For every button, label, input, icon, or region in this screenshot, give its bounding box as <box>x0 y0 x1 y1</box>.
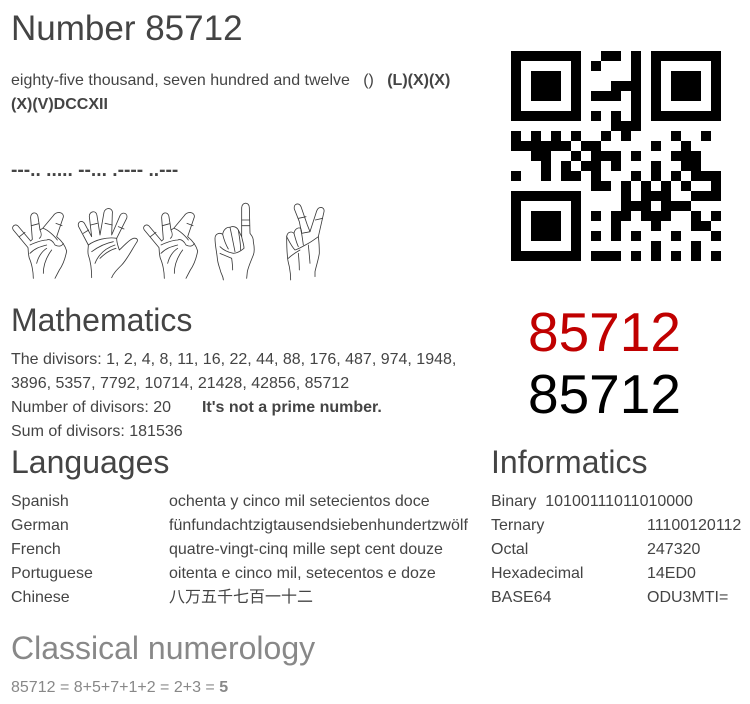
icon: hand 5 <box>78 209 137 278</box>
number name in words and roman numeral <box>11 72 450 113</box>
heading: classical numerology: Classical numerology <box>11 630 315 666</box>
icon: hand 1 <box>215 203 254 280</box>
black number: 85712 <box>528 363 681 425</box>
languages table: oitenta e cinco mil, setecentos e doze <box>169 565 436 582</box>
number name in words and roman numeral: (X)(V)DCCXII <box>11 96 108 113</box>
heading: informatics: Informatics <box>491 444 647 480</box>
icon: hand 7 <box>144 213 198 278</box>
icon: sign language hands <box>12 202 324 280</box>
icon: hand 2 <box>287 204 324 280</box>
informatics table: Hexadecimal <box>491 565 583 582</box>
languages table: German <box>11 517 69 534</box>
mathematics text block: The divisors: 1, 2, 4, 8, 11, 16, 22, 44, 88, 176, 487, 974, 1948, <box>11 351 456 368</box>
mathematics text block: Number of divisors: 20 It's not a prime number. <box>11 399 382 416</box>
languages table: 八万五千七百一十二 <box>169 589 313 606</box>
title: Number 85712 <box>11 9 243 48</box>
informatics table <box>491 493 741 606</box>
languages table: Chinese <box>11 589 70 606</box>
informatics table: ODU3MTI= <box>647 589 728 606</box>
languages table: Portuguese <box>11 565 93 582</box>
languages table: French <box>11 541 61 558</box>
informatics table: 14ED0 <box>647 565 696 582</box>
languages table: Spanish <box>11 493 69 510</box>
red number: 85712 <box>528 301 681 363</box>
QR code <box>511 51 721 261</box>
mathematics text block <box>11 351 456 440</box>
numerology sum: 85712 = 8+5+7+1+2 = 2+3 = 5 <box>11 679 228 696</box>
mathematics text block: 3896, 5357, 7792, 10714, 21428, 42856, 85712 <box>11 375 349 392</box>
informatics table: Octal <box>491 541 528 558</box>
languages table <box>11 493 468 606</box>
languages table: ochenta y cinco mil setecientos doce <box>169 493 430 510</box>
informatics table: Ternary <box>491 517 544 534</box>
languages table: quatre-vingt-cinq mille sept cent douze <box>169 541 443 558</box>
informatics table: Binary 10100111011010000 <box>491 493 693 510</box>
heading: mathematics: Mathematics <box>11 302 192 338</box>
informatics table: 11100120112 <box>647 517 741 534</box>
informatics table: 247320 <box>647 541 700 558</box>
informatics table: BASE64 <box>491 589 551 606</box>
heading: languages: Languages <box>11 444 169 480</box>
languages table: fünfundachtzigtausendsiebenhundertzwölf <box>169 517 468 534</box>
icon: hand 8 <box>13 213 67 278</box>
morse code: ---.. ..... --... .---- ..--- <box>11 160 178 181</box>
mathematics text block: Sum of divisors: 181536 <box>11 423 183 440</box>
number name in words and roman numeral: eighty-five thousand, seven hundred and twelve () (L)(X)(X) <box>11 72 450 89</box>
